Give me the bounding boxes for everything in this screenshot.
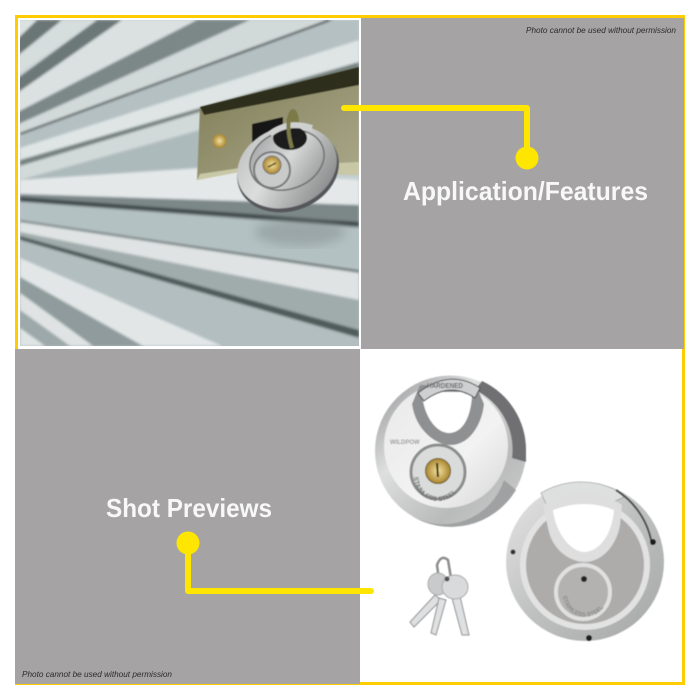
photo: back padlock [506, 481, 664, 642]
caption: bottom permission note: Photo cannot be used without permission [22, 669, 172, 679]
panel: grey top right [361, 18, 684, 349]
panel: white bottom right [360, 349, 682, 682]
lock engraving: HARDENED [427, 383, 463, 390]
photo: padlock on roller shutter door [10, 20, 359, 346]
back engraving: STAINLESS STEEL [562, 596, 604, 617]
caption: top permission note: Photo cannot be used without permission [526, 25, 676, 35]
heading: Shot Previews: Shot Previews [106, 493, 272, 523]
connector: top callout line [344, 108, 538, 170]
heading: Application/Features: Application/Features [403, 176, 648, 206]
padlock [236, 118, 340, 213]
lock engraving [390, 382, 464, 502]
icon: keys [410, 558, 469, 635]
bolt bracket [197, 67, 359, 180]
photo: front padlock [374, 375, 527, 528]
lock engraving: STAINLESS STEEL [413, 476, 456, 502]
connector: bottom callout line [176, 532, 371, 591]
lock engraving: WILDPOW [390, 440, 420, 446]
panel: grey bottom left [15, 349, 360, 684]
